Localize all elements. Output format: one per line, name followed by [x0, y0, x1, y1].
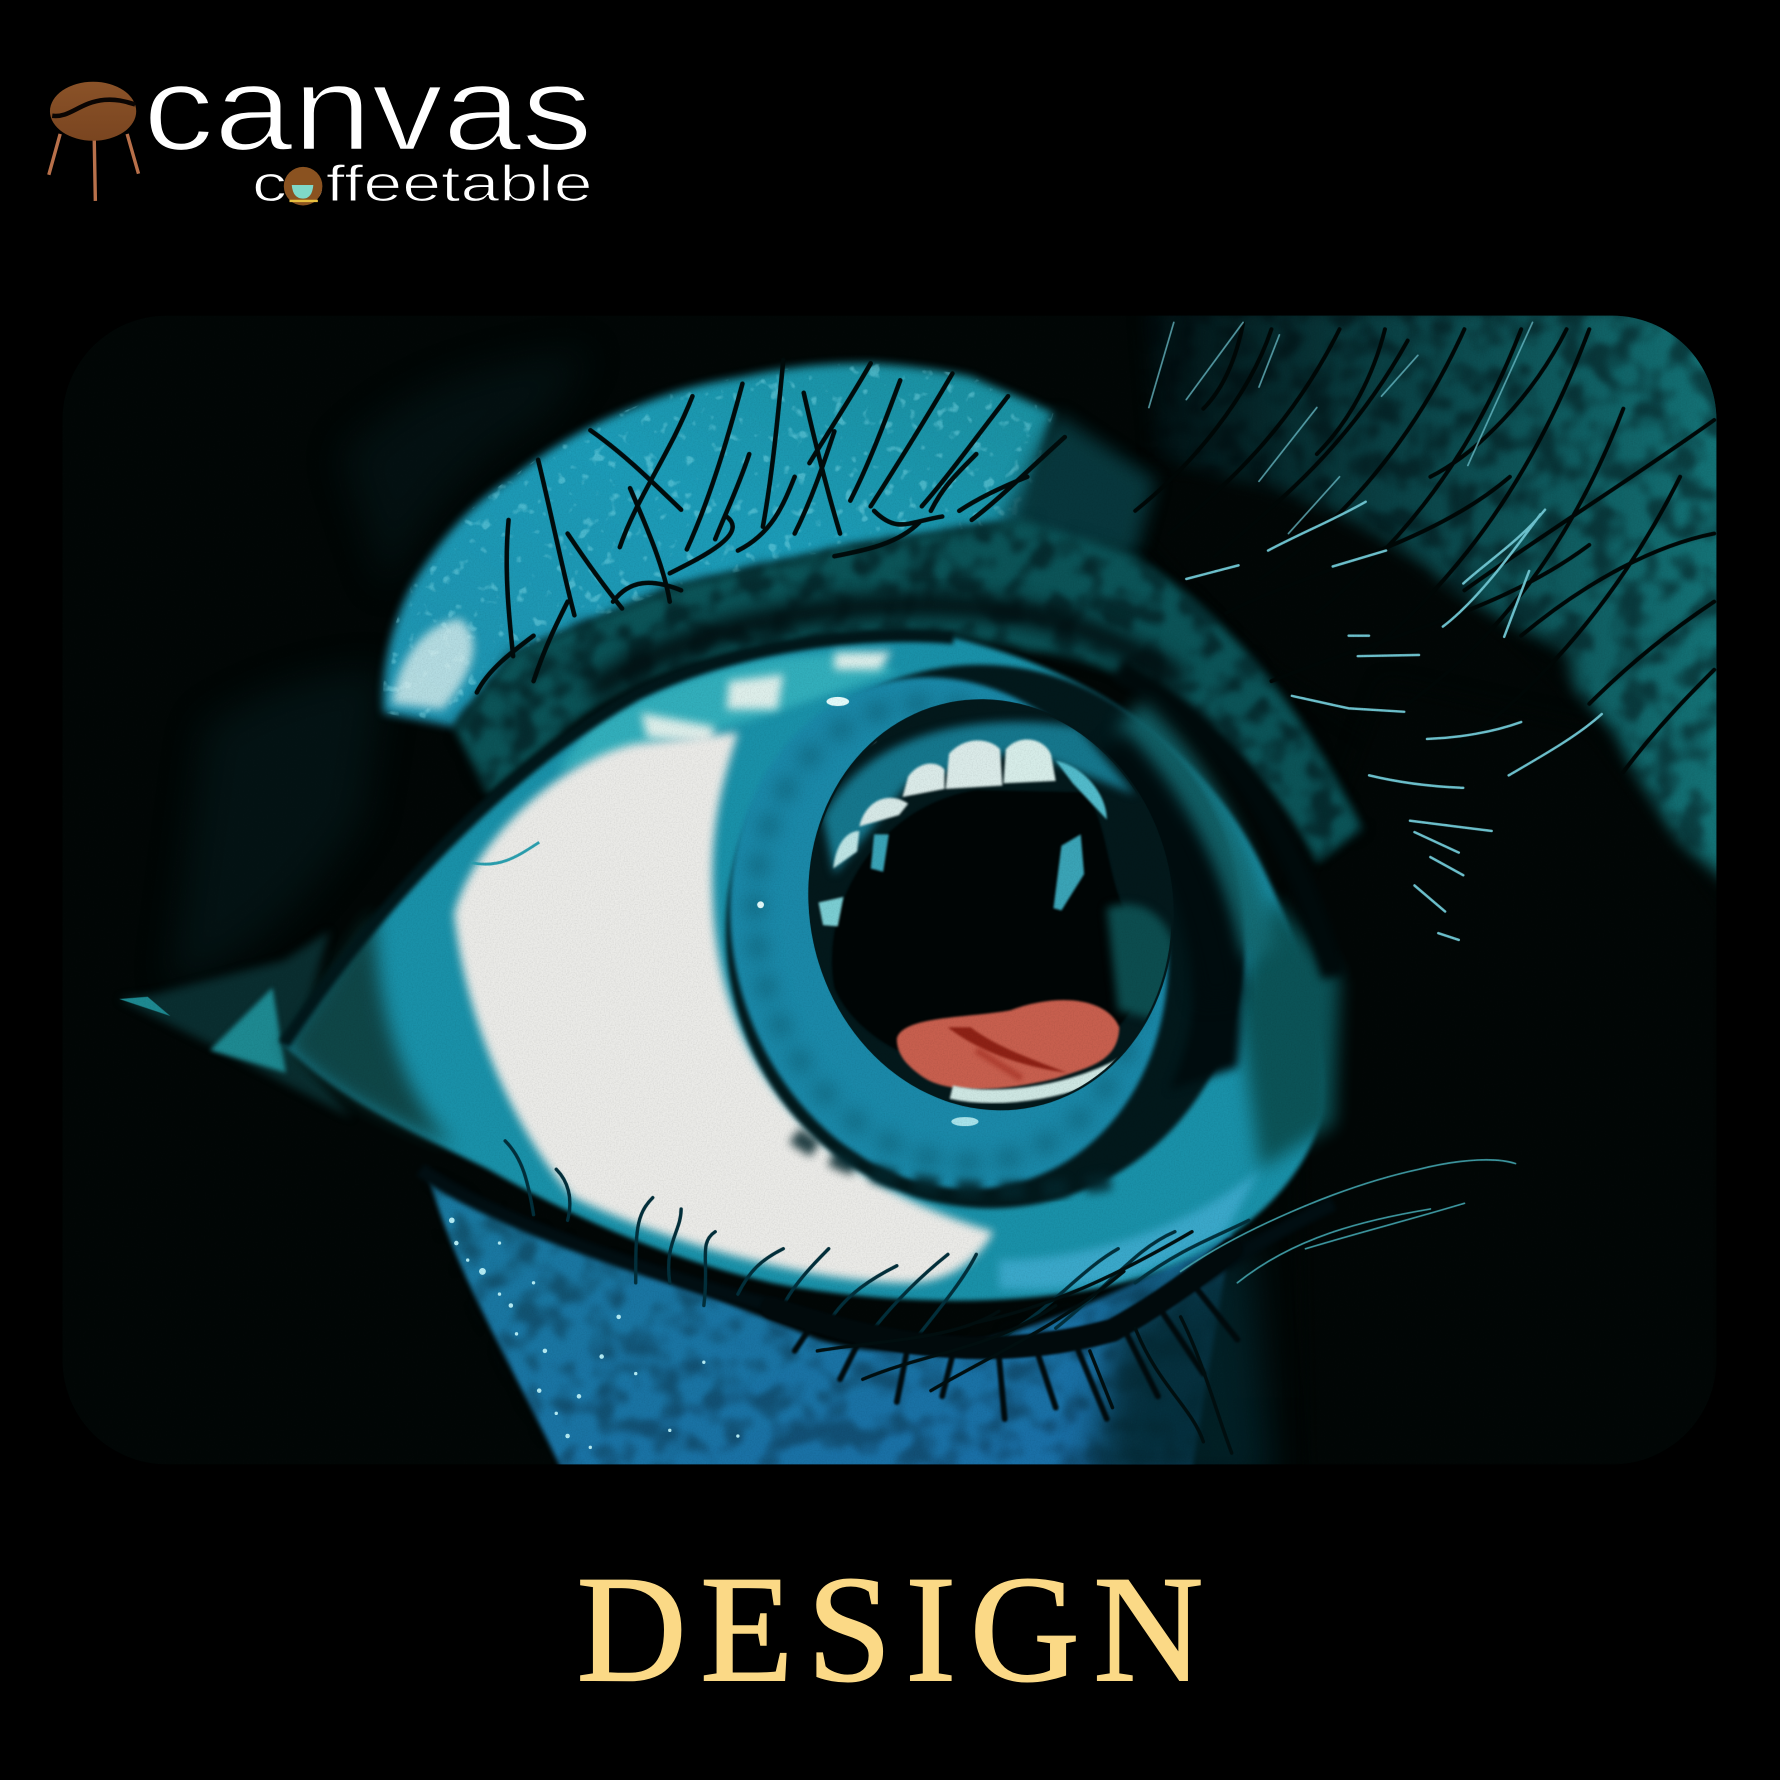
- left dim skin: [183, 375, 547, 965]
- lower eyelid line: [420, 1169, 1334, 1346]
- iris blue ring: [727, 674, 1275, 1202]
- white of the eye: [454, 732, 993, 1283]
- lower lash mass: [772, 1249, 1237, 1419]
- tongue: [897, 1000, 1119, 1089]
- upper eyelashes: [477, 360, 1065, 692]
- logo wordmark: coffeetable: coffeetable: [252, 155, 593, 212]
- eyeball sclera: [284, 636, 1340, 1301]
- lower eyelashes: [505, 1141, 1249, 1340]
- logo wordmark: canvas: canvas: [143, 42, 593, 176]
- mouth cavity: [832, 790, 1141, 1050]
- lower teeth: [951, 1058, 1133, 1096]
- upper right dark lashes: [1135, 324, 1714, 772]
- upper teeth: [818, 738, 1107, 926]
- pupil mouth reflection: [808, 699, 1172, 1111]
- dark limbal ring: [722, 661, 1247, 1212]
- eyelid fold band: [454, 520, 1362, 863]
- brow skin upper right: [1152, 316, 1716, 884]
- icon: coffee cup: [284, 167, 322, 205]
- title: DESIGN: [577, 1544, 1203, 1713]
- upper eyelid skin: [383, 363, 1156, 727]
- icon: coffee bean table: [49, 82, 138, 201]
- right thin lit lashes: [1149, 322, 1602, 940]
- panel: eye artwork: [62, 307, 1737, 1487]
- logo: [49, 42, 593, 212]
- lower cheek skin: [429, 1177, 1271, 1487]
- lower right lashes: [817, 1232, 1232, 1453]
- glint highlights: [757, 697, 979, 1126]
- upper gum: [823, 722, 1135, 874]
- mouth right shadow: [1107, 904, 1181, 1022]
- tear duct corner: [119, 931, 352, 1118]
- paper grain: [62, 316, 1716, 1464]
